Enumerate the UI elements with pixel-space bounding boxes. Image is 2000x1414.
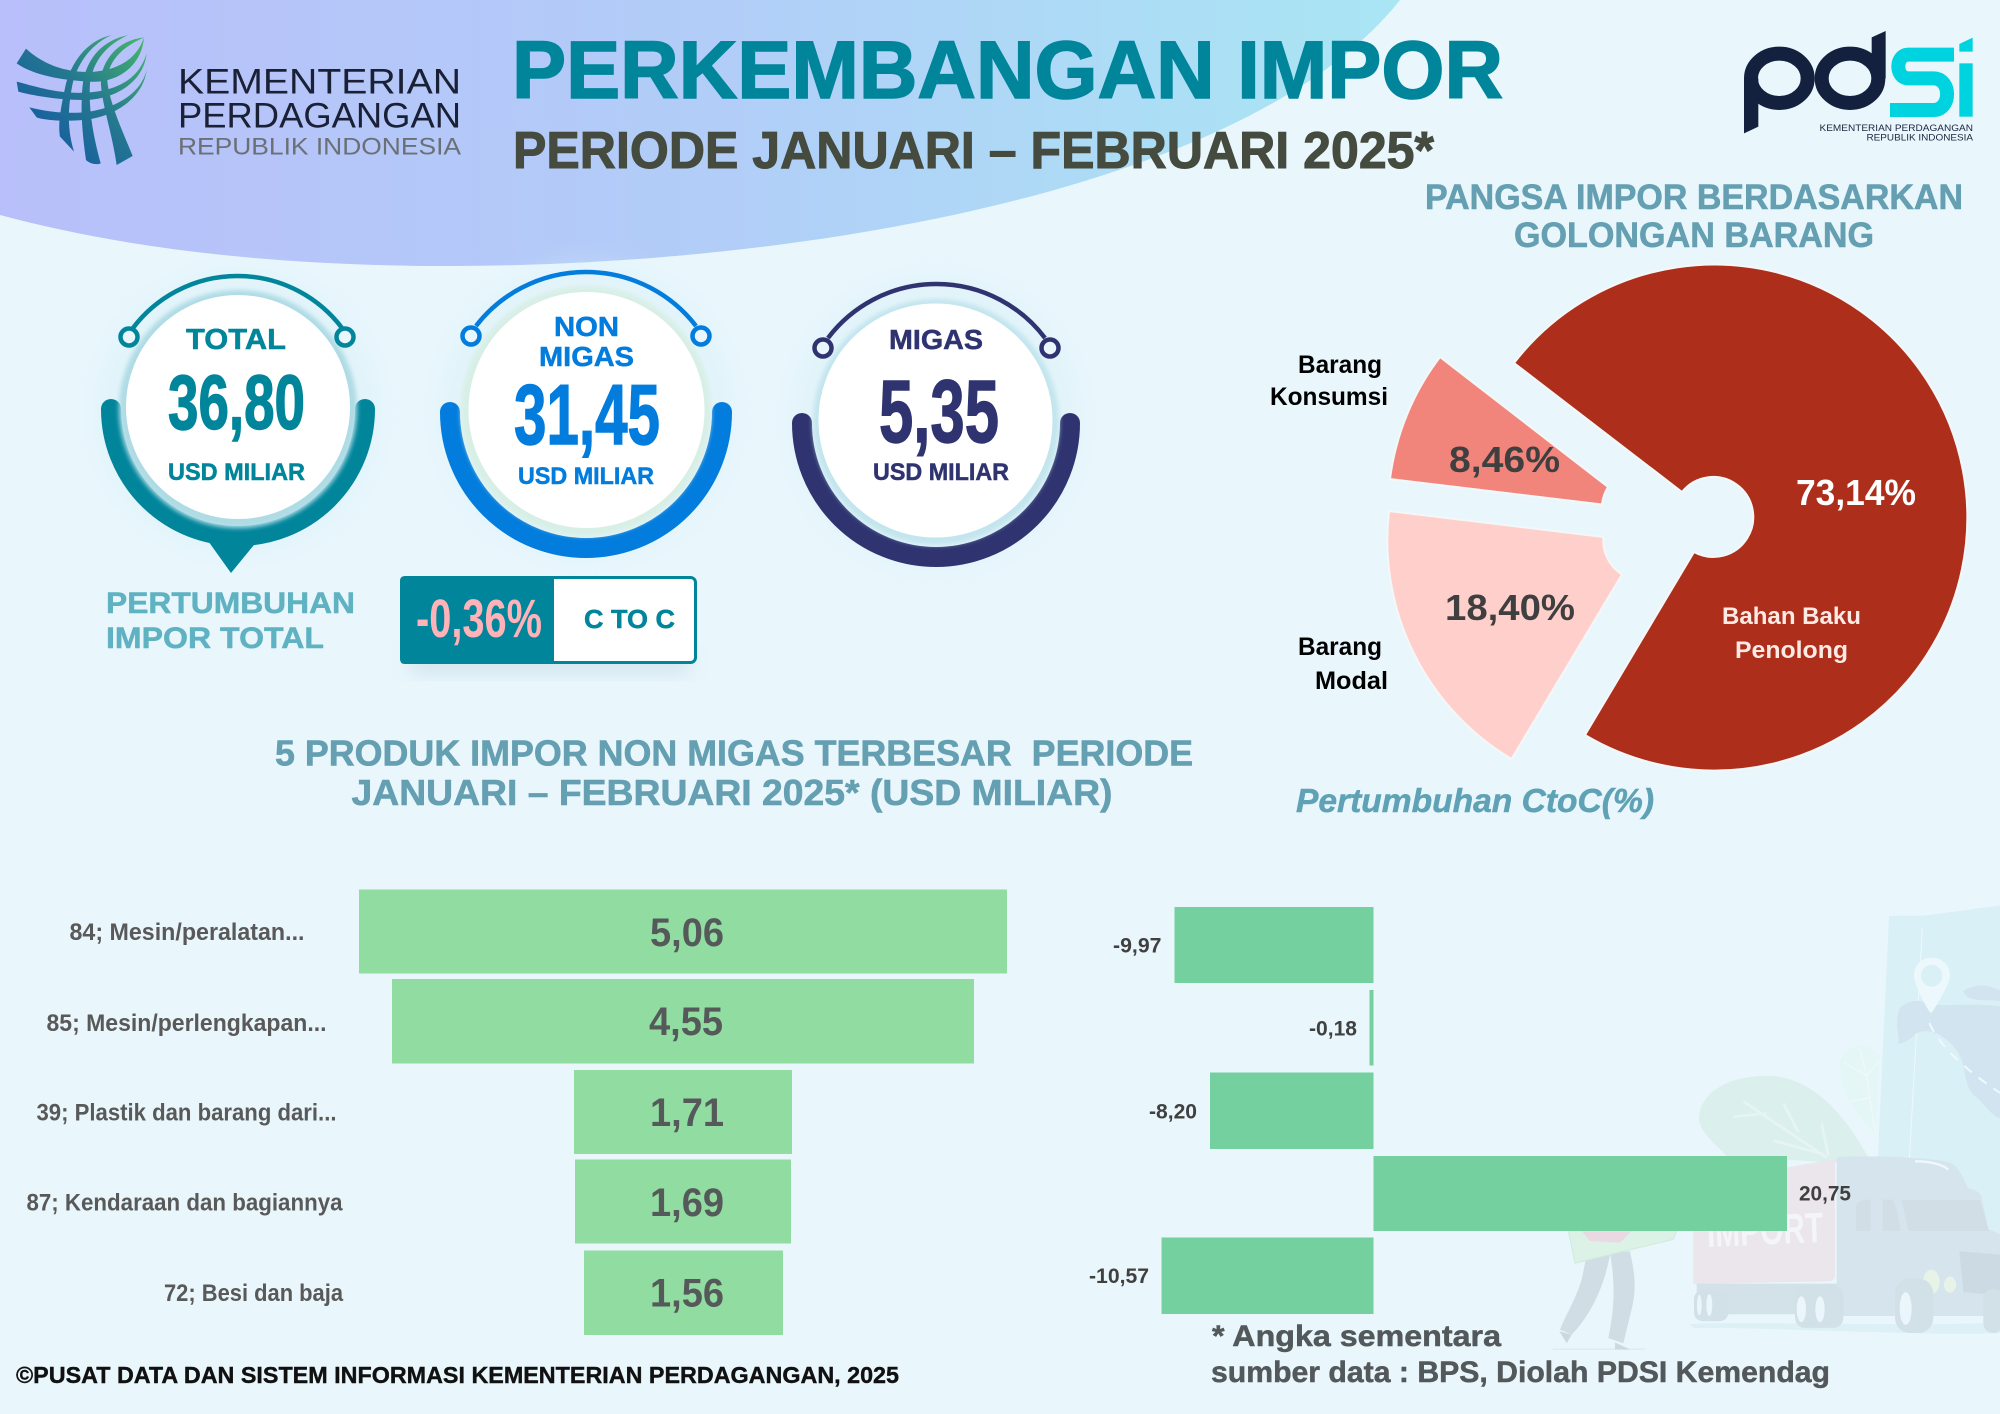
bar chart: growth [1089, 907, 1851, 1314]
badge: migas: 5,35 [879, 361, 999, 461]
bar: 85: 85; Mesin/perlengkapan... [46, 1010, 326, 1037]
logo caption: KEMENTERIAN PERDAGANGAN [1820, 123, 1973, 134]
source note [1211, 1320, 1830, 1389]
logo wordmark: PERDAGANGAN [178, 96, 461, 136]
bar: 84: 84; Mesin/peralatan... [70, 919, 304, 946]
growth callout box [400, 576, 696, 674]
bar: 72 [164, 1250, 783, 1335]
badge: total: USD MILIAR [168, 459, 305, 486]
badge: migas: USD MILIAR [873, 459, 1009, 486]
bar: 85 [46, 979, 974, 1064]
badge: non migas: NON [554, 311, 619, 342]
pie chart heading: PANGSA IMPOR BERDASARKAN [1425, 178, 1963, 217]
subtitle: PERIODE JANUARI – FEBRUARI 2025* [513, 122, 1435, 180]
slice: barang konsumsi: 8,46% [1449, 439, 1560, 480]
slice: barang konsumsi: Konsumsi [1270, 383, 1388, 411]
bar: 87: 1,69 [650, 1181, 724, 1225]
bar: -8,20 [1149, 1072, 1374, 1149]
badge: non migas [434, 260, 738, 564]
bar: 39: 1,71 [650, 1091, 724, 1135]
growth heading: IMPOR TOTAL [106, 622, 324, 655]
logo caption [1820, 123, 1974, 144]
truck label: IMPORT [1706, 1204, 1824, 1256]
slice: barang modal: Modal [1315, 667, 1388, 695]
source note: sumber data : BPS, Diolah PDSI Kemendag [1211, 1356, 1830, 1389]
logo wordmark [178, 62, 461, 160]
pie chart heading [1425, 178, 1963, 255]
slice: bahan baku penolong: Penolong [1735, 637, 1848, 664]
badge: total: TOTAL [186, 324, 286, 356]
copyright footer: ©PUSAT DATA DAN SISTEM INFORMASI KEMENTERIAN PERDAGANGAN, 2025 [16, 1362, 899, 1388]
bar chart heading: JANUARI – FEBRUARI 2025* (USD MILIAR) [352, 772, 1112, 813]
growth chart heading: Pertumbuhan CtoC(%) [1296, 782, 1654, 819]
growth callout box: -0,36% [416, 589, 542, 649]
bar: -9,97 [1113, 907, 1374, 983]
bar chart heading [275, 732, 1193, 813]
logo wordmark: KEMENTERIAN [178, 62, 461, 102]
slice: bahan baku penolong [1514, 265, 1967, 771]
icon: ministry emblem [17, 35, 147, 165]
bar: 84: 5,06 [650, 911, 724, 955]
slice: barang modal [1298, 511, 1622, 759]
title: PERKEMBANGAN IMPOR [512, 25, 1503, 116]
bar: -0,18: -0,18 [1309, 1018, 1357, 1040]
slice: barang konsumsi: Barang [1298, 351, 1382, 379]
badge: non migas: MIGAS [539, 341, 634, 372]
slice: barang modal: Barang [1298, 633, 1382, 661]
bar: -8,20: -8,20 [1149, 1100, 1197, 1124]
bar: 72: 1,56 [650, 1272, 724, 1316]
source note: * Angka sementara [1212, 1320, 1501, 1353]
pie chart heading: GOLONGAN BARANG [1514, 216, 1874, 255]
bar: -9,97: -9,97 [1113, 934, 1162, 958]
funnel chart: top 5 products [26, 890, 1007, 1335]
slice: barang konsumsi [1270, 351, 1608, 504]
icon: pdsi mark [1744, 31, 1973, 133]
badge: migas: MIGAS [889, 324, 983, 355]
logo: PDSI [1744, 31, 1974, 144]
logo caption: REPUBLIK INDONESIA [1866, 133, 1974, 144]
bar: 87 [26, 1160, 791, 1244]
slice: bahan baku penolong: Bahan Baku [1722, 603, 1861, 630]
bar: 87: 87; Kendaraan dan bagiannya [26, 1190, 343, 1216]
bar: 39: 39; Plastik dan barang dari... [36, 1100, 336, 1126]
slice: barang modal: 18,40% [1445, 587, 1575, 628]
pie chart [1270, 265, 1967, 771]
bar: 72: 72; Besi dan baja [164, 1280, 344, 1307]
bar: -0,18 [1309, 990, 1374, 1066]
background illustration: map and import truck [1553, 906, 2000, 1350]
bar: 20,75: 20,75 [1799, 1182, 1851, 1206]
badge: migas [786, 272, 1086, 572]
logo: Kementerian Perdagangan [17, 35, 461, 165]
growth heading [106, 587, 355, 655]
growth callout box: C TO C [584, 604, 675, 634]
bar: 84 [70, 890, 1007, 974]
badge: non migas: 31,45 [514, 368, 660, 463]
slice: bahan baku penolong: 73,14% [1796, 472, 1916, 513]
bar chart heading: 5 PRODUK IMPOR NON MIGAS TERBESAR PERIODE [275, 732, 1193, 774]
logo wordmark: REPUBLIK INDONESIA [178, 134, 461, 160]
badge: total: 36,80 [168, 360, 305, 446]
growth heading: PERTUMBUHAN [106, 587, 355, 620]
badge: total [92, 266, 384, 573]
bar: -10,57: -10,57 [1089, 1265, 1149, 1288]
header banner [0, 0, 1400, 266]
bar: 85: 4,55 [649, 1000, 723, 1044]
badge: non migas: USD MILIAR [518, 463, 654, 490]
bar: 39 [36, 1070, 792, 1154]
bar: 20,75 [1374, 1156, 1851, 1231]
bar: -10,57 [1089, 1238, 1374, 1314]
